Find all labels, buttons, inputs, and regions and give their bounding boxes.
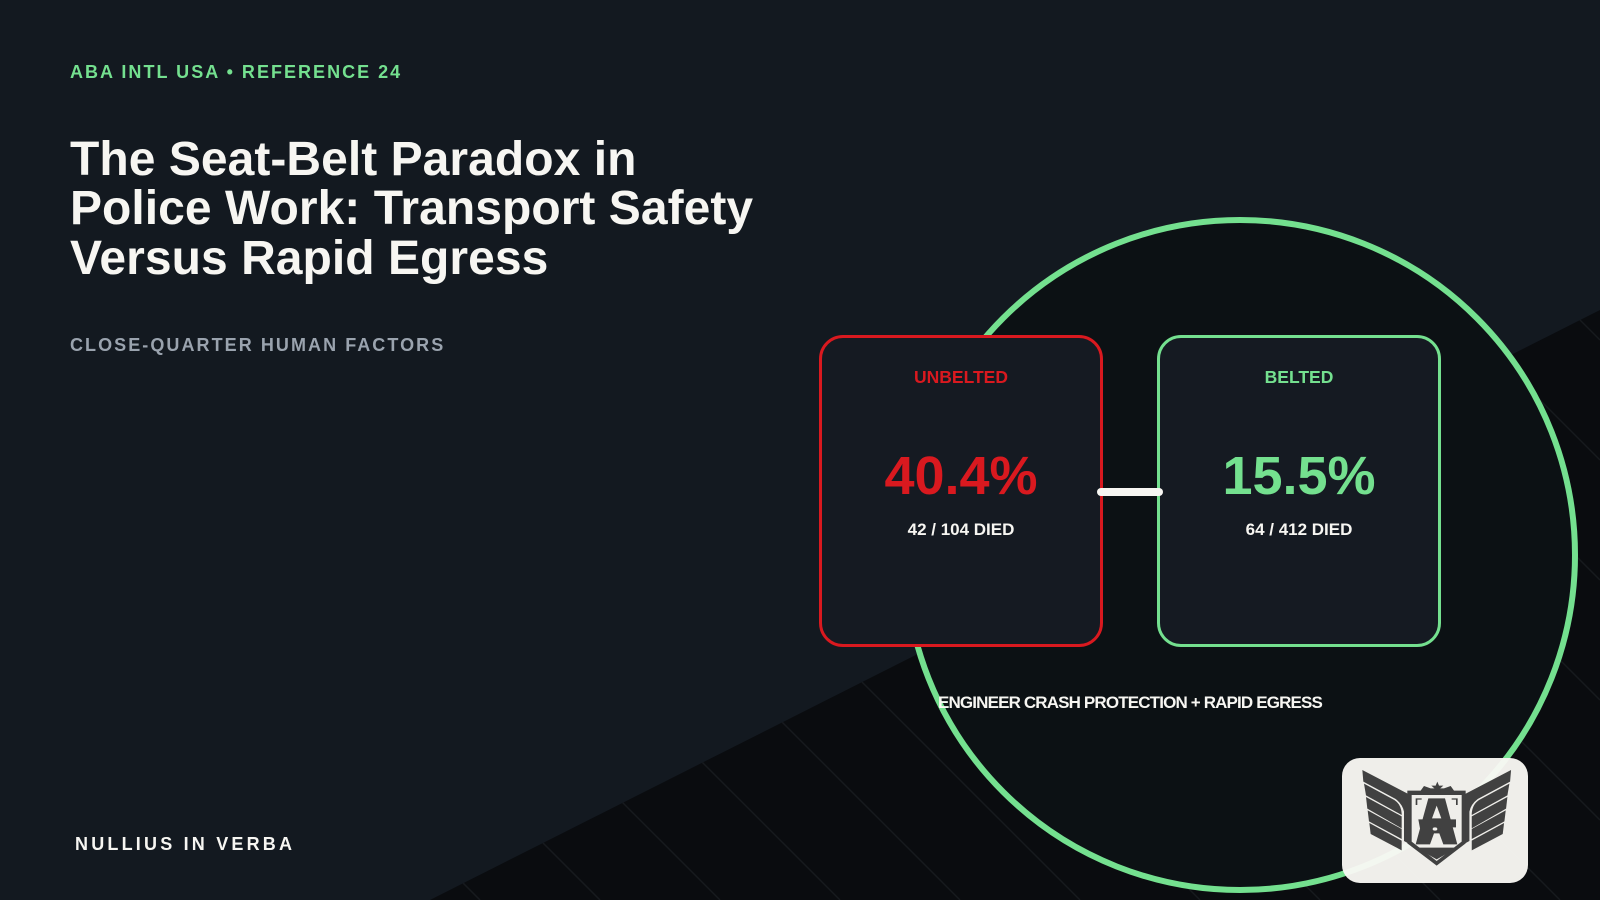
icon: left wing: [1362, 770, 1408, 850]
title: The Seat-Belt Paradox in: [70, 132, 636, 186]
subtitle: CLOSE-QUARTER HUMAN FACTORS: [70, 335, 445, 355]
connector between cards: [1097, 488, 1163, 496]
stat: 15.5%: 15.5%: [1222, 446, 1376, 506]
count: unbelted deaths: 42 / 104 DIED: [908, 520, 1014, 539]
panel: belted: [1157, 335, 1441, 647]
title: Versus Rapid Egress: [70, 232, 548, 284]
footer motto: NULLIUS IN VERBA: [75, 834, 295, 854]
count: belted deaths: 64 / 412 DIED: [1246, 520, 1352, 539]
eyebrow: ABA INTL USA • REFERENCE 24: [70, 62, 402, 82]
title: Police Work: Transport Safety: [70, 182, 753, 235]
caption: ENGINEER CRASH PROTECTION + RAPID EGRESS: [938, 692, 1322, 712]
label: belted: BELTED: [1265, 367, 1333, 387]
logo badge: [1342, 758, 1528, 883]
icon: right wing: [1465, 770, 1511, 850]
icon: shield with letter and pistol: [1407, 782, 1466, 866]
green circle: [914, 217, 1578, 893]
stat: 40.4%: 40.4%: [884, 446, 1038, 506]
panel: unbelted: [819, 335, 1103, 647]
label: unbelted: UNBELTED: [914, 367, 1008, 387]
title: [70, 132, 753, 284]
